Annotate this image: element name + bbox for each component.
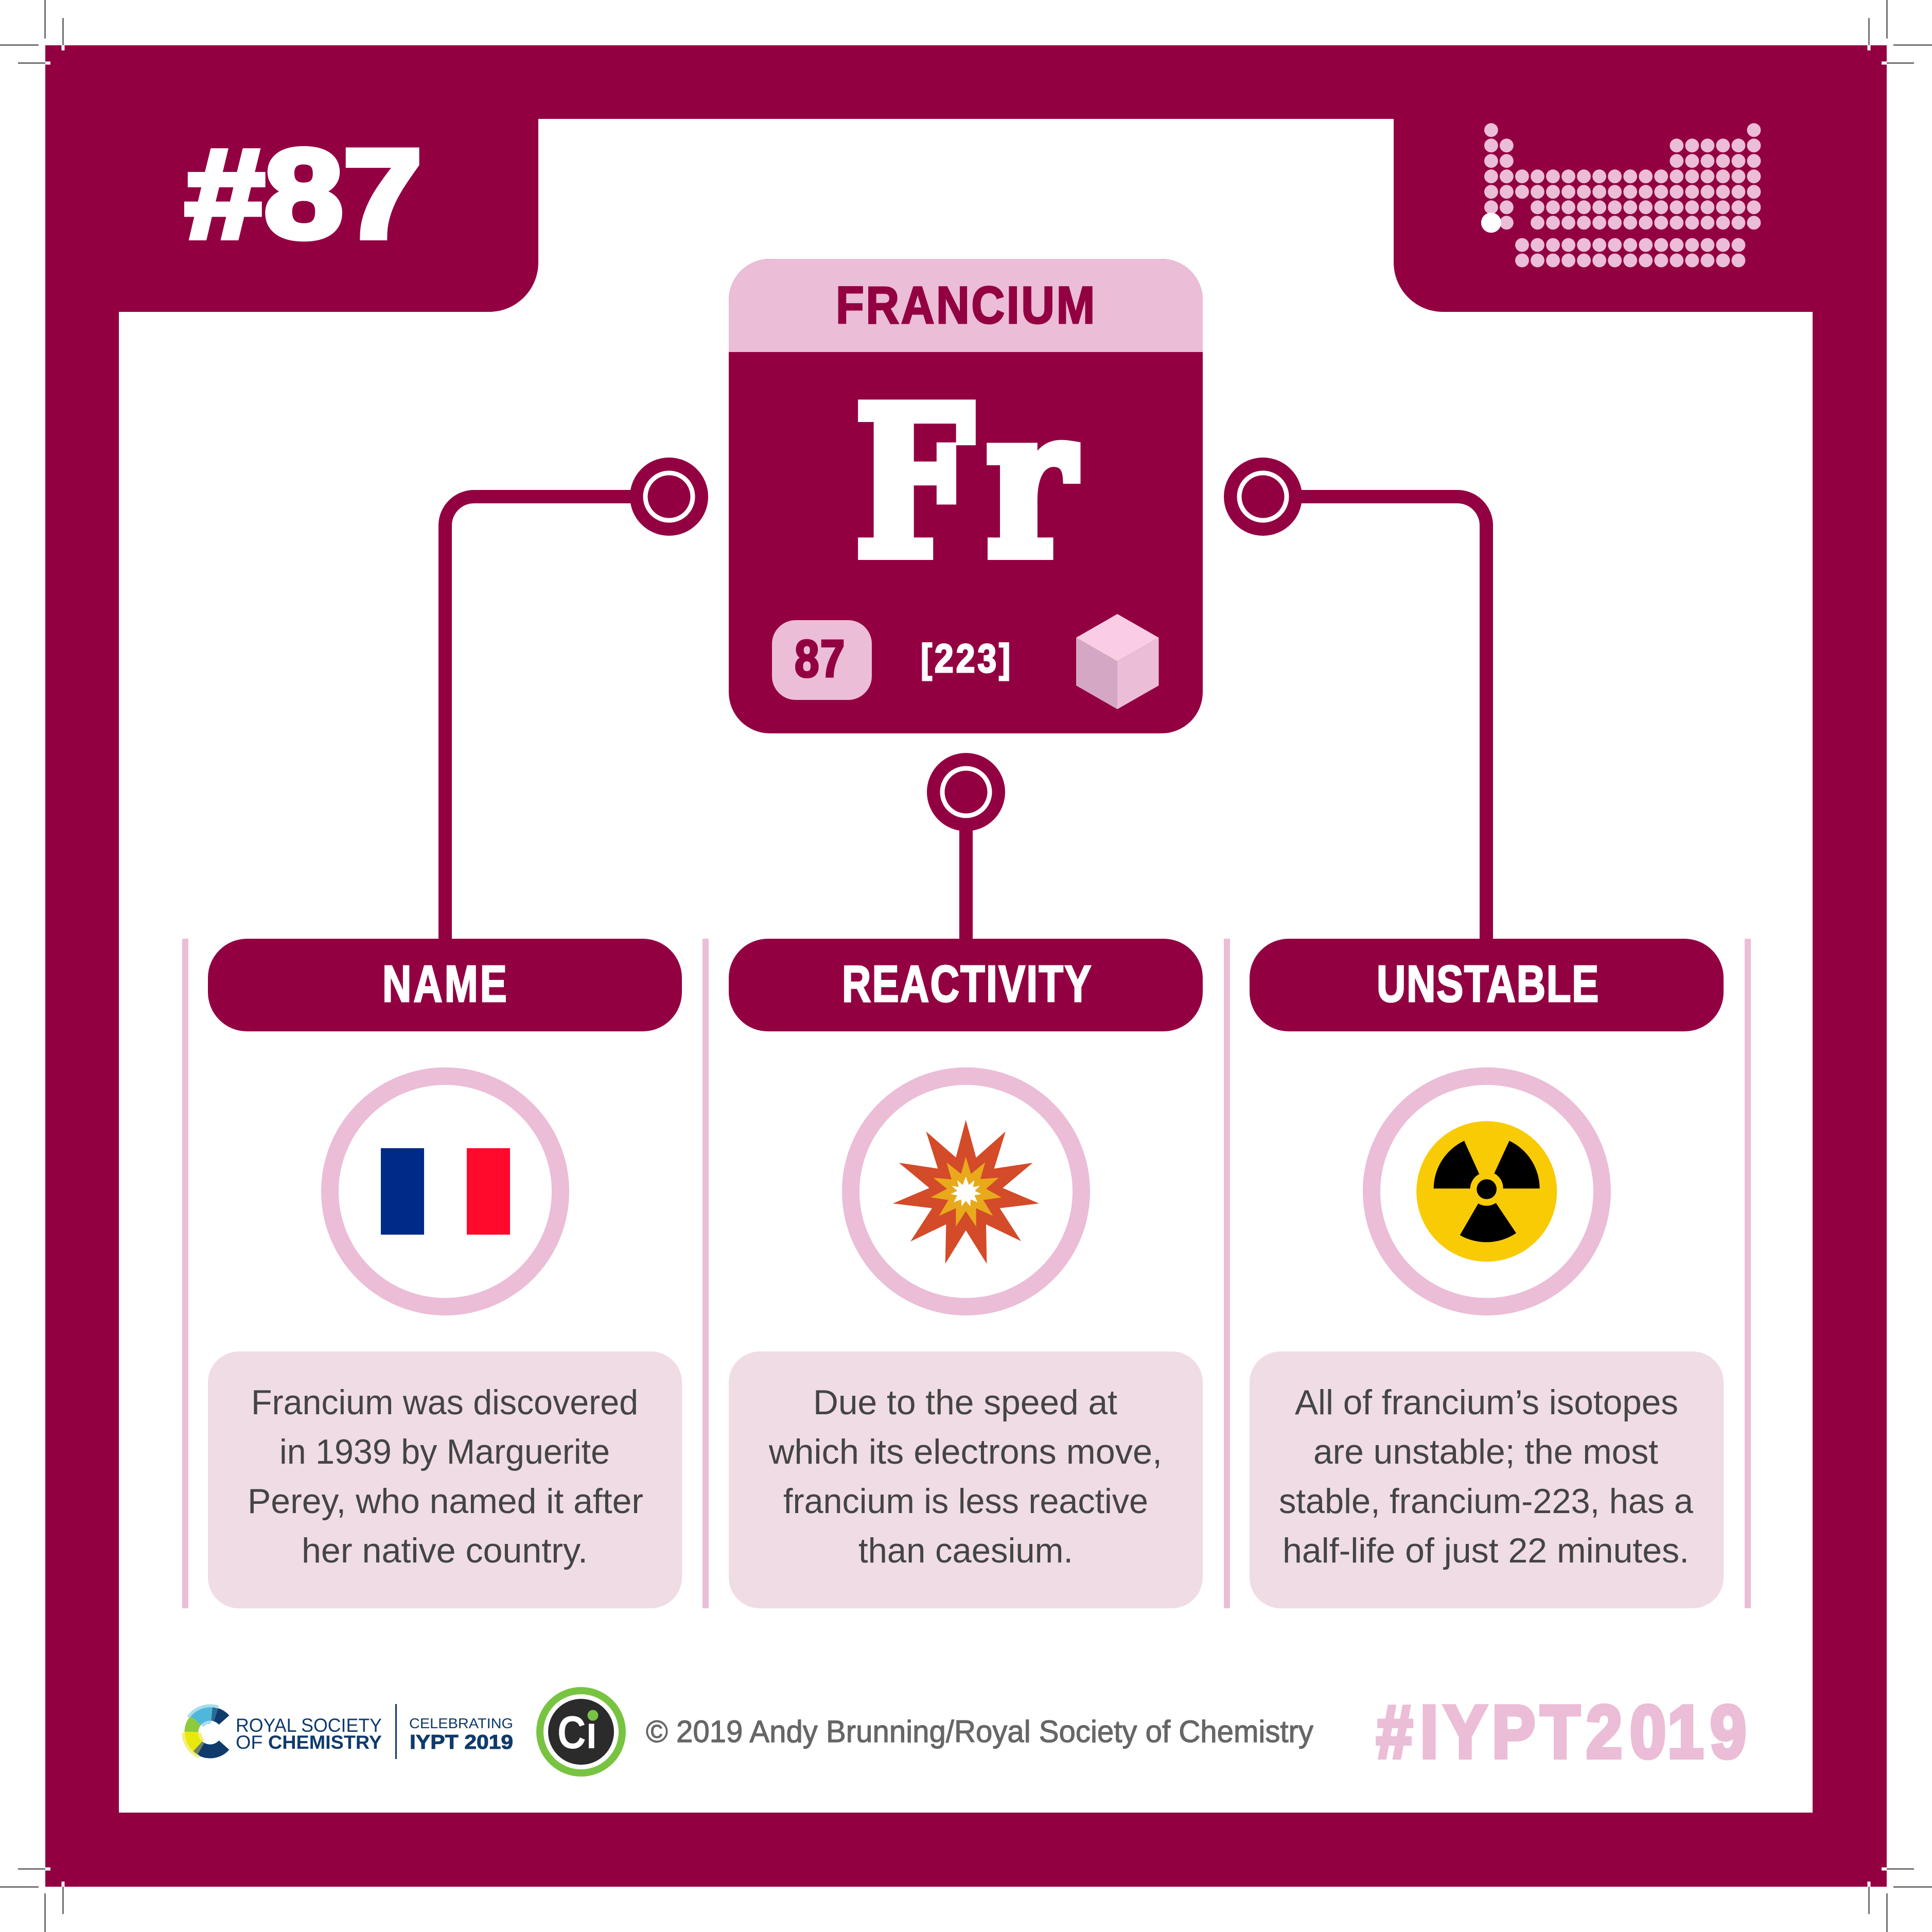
- Royal Society of Chemistry logo: [183, 1704, 513, 1759]
- IYPT celebration wordmark: [409, 1715, 513, 1753]
- name text block: in 1939 by Marguerite: [279, 1432, 610, 1471]
- element name: FRANCIUM: [836, 276, 1095, 335]
- reactivity heading: REACTIVITY: [842, 956, 1091, 1013]
- card header: [729, 259, 1203, 352]
- element symbol: F: [854, 362, 974, 604]
- connector node right: [1224, 458, 1302, 536]
- reactivity heading: [729, 939, 1203, 1031]
- Chemistry Ci logo: [540, 1691, 622, 1773]
- unstable heading: [1250, 939, 1724, 1031]
- element symbol: [854, 362, 1078, 604]
- icon: RSC C mark: [183, 1706, 224, 1757]
- element card: [729, 259, 1203, 733]
- RSC wordmark: ROYAL SOCIETY: [236, 1715, 382, 1736]
- periodic table locator icon: [1481, 130, 1754, 260]
- name text block: Francium was discovered: [251, 1383, 638, 1422]
- panel: reactivity: [729, 939, 1203, 1608]
- unstable text block: All of francium’s isotopes: [1295, 1383, 1678, 1422]
- reactivity text block: than caesium.: [858, 1531, 1073, 1570]
- atomic number badge: [772, 620, 872, 700]
- cube icon: [1076, 614, 1159, 709]
- name heading: [208, 939, 682, 1031]
- unstable text block: half-life of just 22 minutes.: [1283, 1531, 1689, 1570]
- IYPT celebration wordmark: CELEBRATING: [409, 1715, 513, 1731]
- panel: unstable: [1250, 939, 1724, 1608]
- reactivity text block: francium is less reactive: [783, 1482, 1148, 1521]
- RSC wordmark: [236, 1715, 382, 1753]
- unstable text block: [1250, 1351, 1724, 1608]
- connector node centre: [927, 753, 1005, 831]
- Chemistry Ci logo: Ci: [557, 1707, 597, 1759]
- atomic mass: [223]: [921, 636, 1010, 681]
- IYPT celebration wordmark: IYPT 2019: [410, 1731, 513, 1753]
- white content area with corner tabs: [119, 119, 1813, 1813]
- copyright line: © 2019 Andy Brunning/Royal Society of Chemistry: [646, 1714, 1313, 1749]
- connector node left: [630, 458, 708, 536]
- element number: #87: [185, 123, 422, 264]
- unstable heading: UNSTABLE: [1377, 956, 1599, 1013]
- panel: name: [208, 939, 682, 1608]
- connector lines: [445, 497, 1486, 942]
- icon: French flag: [330, 1076, 560, 1307]
- hashtag: #IYPT2019: [1377, 1690, 1746, 1773]
- unstable text block: are unstable; the most: [1313, 1432, 1658, 1471]
- name heading: NAME: [382, 956, 507, 1013]
- icon: explosion: [851, 1076, 1081, 1307]
- name text block: her native country.: [302, 1531, 588, 1570]
- reactivity text block: [729, 1351, 1203, 1608]
- name text block: [208, 1351, 682, 1608]
- RSC wordmark: OF CHEMISTRY: [236, 1732, 382, 1753]
- atomic number: 87: [795, 629, 845, 688]
- element symbol: r: [986, 362, 1078, 604]
- unstable text block: stable, francium-223, has a: [1279, 1482, 1693, 1521]
- column dividers: [182, 939, 1751, 1608]
- reactivity text block: Due to the speed at: [813, 1383, 1117, 1422]
- name text block: Perey, who named it after: [248, 1482, 643, 1521]
- icon: radiation trefoil: [1372, 1076, 1602, 1307]
- reactivity text block: which its electrons move,: [768, 1432, 1162, 1471]
